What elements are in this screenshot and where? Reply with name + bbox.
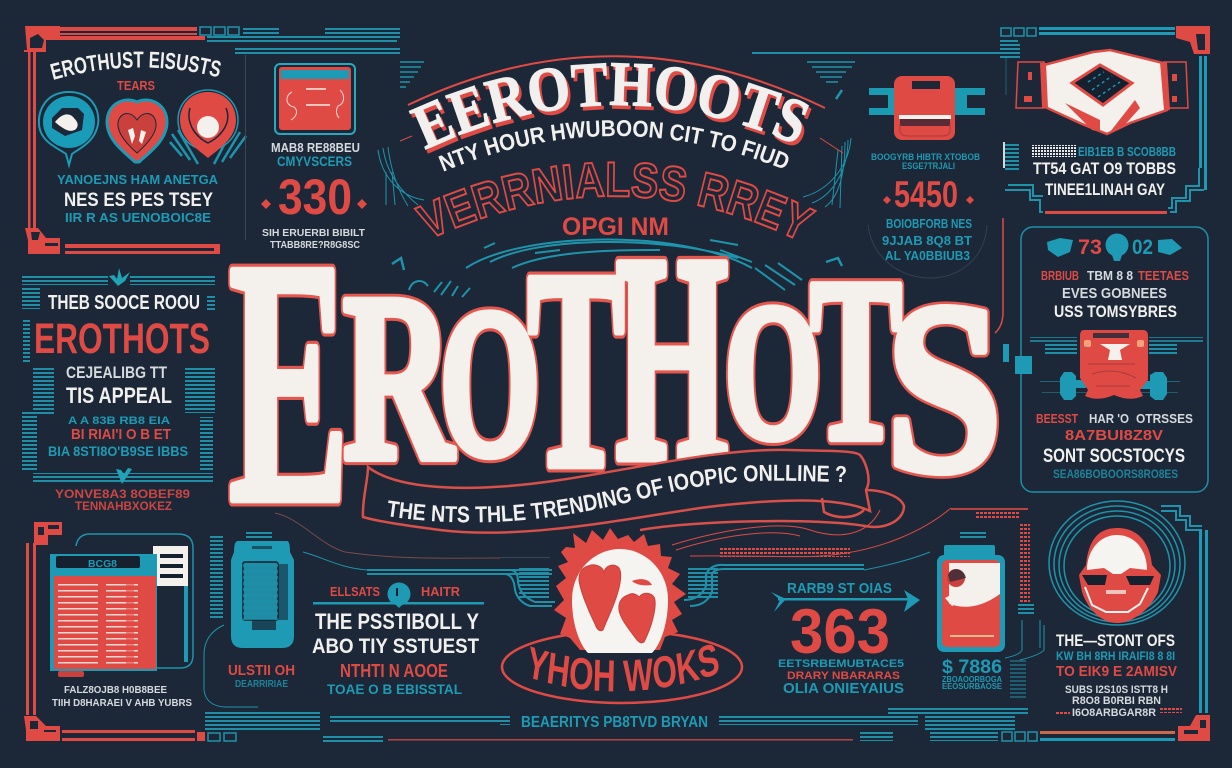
text block: A A 83B RB8 EIA: [68, 415, 170, 427]
text block: USS TOMSYBRES: [1054, 302, 1177, 321]
icon: robot: [1060, 330, 1167, 400]
dotted header: [1032, 144, 1176, 159]
panel: device: DEARRIRIAE: [235, 679, 288, 690]
stat number: 330: [278, 169, 352, 225]
tab: [1015, 356, 1032, 374]
arc title: EEROTHOOTS: [411, 66, 812, 154]
text block: NES ES PES TSEY: [64, 190, 213, 211]
panel: device: ULSTII OH: [228, 662, 295, 679]
main title: EROTHOTS: H: [616, 194, 728, 523]
window outline: [76, 534, 193, 668]
text block: YONVE8A3 8OBEF89: [55, 487, 190, 501]
panel: screen stat 330: [261, 64, 367, 251]
panel: possibility text: [312, 582, 484, 697]
main title: EROTHOTS: T: [527, 212, 625, 527]
panel: phone stat 363: EETSRBEMUBTACE5: [778, 658, 904, 670]
text block: HAR 'O: [1089, 411, 1129, 426]
panel: screen stat 330: SIH ERUERBI BIBILT: [262, 228, 365, 239]
text block: TO EIK9 E 2AMISV: [1056, 663, 1177, 680]
text block: EROTHOTS: [34, 315, 210, 363]
icon: red box: [869, 76, 985, 140]
text block: I6O8ARBGAR8R: [1072, 707, 1156, 719]
panel: phone stat 363: ZBOAOORBOGA: [942, 675, 1002, 684]
text block: [34, 292, 210, 513]
panel: phone stat 363: $ 7886: [942, 657, 1002, 678]
right icon panel: 5450: BOOGYRB HIBTR XTOBOB: [871, 152, 980, 162]
text block: THE—STONT OFS: [1056, 631, 1175, 650]
stat number: 363: [790, 597, 890, 667]
right icon panel: 5450: [868, 76, 1009, 362]
text block: BRBIUB: [1041, 268, 1079, 283]
icon row: [1047, 234, 1182, 261]
stat number: 5450: [894, 174, 958, 215]
sun badge: [500, 528, 744, 704]
text block: TIS APPEAL: [66, 383, 172, 408]
icon row: 73: [1078, 236, 1102, 259]
main title: EROTHOTS: S: [886, 253, 1002, 524]
main title: EROTHOTS: T: [527, 212, 625, 527]
main title: EROTHOTS: [229, 189, 1002, 574]
main title: EROTHOTS: E: [229, 189, 349, 574]
icon: teal heart badge: [39, 92, 98, 165]
icon: handshake: [1016, 50, 1188, 134]
bottom caption: [388, 714, 918, 740]
text block: CEJEALIBG TT: [66, 363, 167, 382]
text block: 8A7BUI8Z8V: [1065, 427, 1163, 444]
main title: EROTHOTS: O: [439, 266, 541, 501]
diamonds: [261, 199, 367, 209]
banner: [362, 448, 906, 534]
icon: spreadsheet window: [50, 546, 188, 677]
arc subtitle: NTY HOUR HWUBOON CIT TO FIUD: [438, 120, 788, 172]
side fans around titles: [378, 62, 855, 208]
panel: phone stat 363: DRARY NBARARAS: [787, 670, 900, 682]
right icon panel: 5450: 9JJAB 8Q8 BT: [882, 233, 972, 248]
panel: possibility text: ELLSATS: [330, 585, 380, 599]
subheading: TEARS: [117, 78, 155, 93]
panel: screen stat 330: CMYVSCERS: [277, 153, 352, 169]
panel: possibility text: TOAE O B EBISSTAL: [327, 681, 462, 697]
top decorative lines: [207, 27, 1020, 95]
frame: [24, 26, 239, 254]
icon row: 02: [1132, 236, 1153, 259]
main title: EROTHOTS: T: [810, 231, 902, 489]
icon: spreadsheet window: BCG8: [88, 559, 117, 570]
text block: BI RIAI'I O B ET: [71, 426, 171, 443]
text block: IIR R AS UENOBOIC8E: [65, 210, 211, 225]
panel: face: [1049, 501, 1210, 741]
icon: leaf top: [109, 268, 130, 286]
icon: red bubble badge: [170, 90, 246, 164]
text block: YANOEJNS HAM ANETGA: [57, 172, 219, 187]
white ellipse: [572, 549, 668, 653]
text block: [1036, 411, 1193, 481]
text block: TEETAES: [1138, 268, 1189, 283]
panel: document window: TIIH D8HARAEI V AHB YUBRS: [52, 698, 192, 709]
text block: R8O8 B0RBI RBN: [1072, 695, 1161, 707]
main title: EROTHOTS: S: [886, 253, 1002, 524]
right icon panel: 5450: ESGE7TRJALI: [902, 161, 955, 171]
badge text: YHOH WOKS: [530, 644, 719, 692]
panel: phone stat 363: EEOSURBAOSE: [942, 682, 1003, 691]
arrow: [771, 590, 920, 612]
icon: teal circle: [388, 582, 410, 608]
main title: EROTHOTS: T: [810, 231, 902, 489]
teal swooshes: [392, 239, 842, 297]
panel: document window: [24, 522, 236, 741]
arc outlined title: VERRNIALSS RREY: [413, 161, 818, 239]
main title: EROTHOTS: O: [724, 266, 822, 480]
frame: [1000, 26, 1210, 214]
panel: device: [204, 531, 295, 707]
sunburst: [554, 528, 686, 650]
panel: possibility text: ABO TIY SSTUEST: [312, 635, 479, 658]
panel: possibility text: HAITR: [421, 585, 460, 599]
panel: handshake: TT54 GAT O9 TOBBS: [1033, 159, 1176, 178]
text block: SUBS I2S10S ISTT8 H: [1065, 684, 1168, 696]
main title: EROTHOTS: O: [724, 266, 822, 480]
text block: SONT SOCSTOCYS: [1043, 446, 1185, 467]
panel: heart types: [24, 26, 247, 254]
text block: [1041, 268, 1189, 321]
panel: possibility text: NTHTI N AOOE: [340, 661, 448, 681]
text block: OTRSSES: [1136, 411, 1193, 426]
panel: possibility text: THE PSSTIBOLL Y: [315, 609, 479, 634]
bottom right lines: [205, 708, 1175, 742]
arc title: EEROTHOOTS: [408, 62, 809, 150]
text block: BEESST: [1036, 411, 1078, 426]
stripes frame: [22, 275, 215, 483]
main title: EROTHOTS: H: [616, 194, 728, 523]
panel: handshake: TINEE1LINAH GAY: [1045, 180, 1166, 199]
panel: appeal: [22, 268, 215, 513]
text block: [1056, 631, 1182, 719]
main title: EROTHOTS: O: [439, 266, 541, 501]
icon: red monitor: [275, 64, 355, 134]
arc tagline: OPGI NM: [562, 213, 669, 241]
text block: SEA86BOBOORS8RO8ES: [1053, 467, 1178, 481]
icon: teal device: [231, 541, 294, 648]
frame: [1161, 506, 1210, 741]
icon: hearts: [579, 565, 655, 643]
caption: FALZ8OJB8 H0B8BEE: [64, 685, 167, 696]
icon: leaf bottom: [116, 468, 132, 484]
main title: EROTHOTS: R: [343, 245, 455, 510]
icon: phone: [937, 532, 1005, 652]
text block: KW BH 8RH IRAIFI8 8 8I: [1056, 649, 1175, 663]
main title: EROTHOTS: E: [229, 189, 349, 574]
panel: phone stat 363: OLIA ONIEYAIUS: [783, 680, 904, 697]
heading: EROTHUST EISUSTS: [50, 52, 221, 80]
text block: [57, 172, 219, 225]
banner text: THE NTS THLE TRENDING OF IOOPIC ONLLINE ?: [388, 464, 846, 523]
icon: red heart badge: [107, 100, 167, 162]
text block: TBM 8 8: [1087, 268, 1133, 283]
frame: [24, 522, 236, 741]
panel: screen stat 330: TTABB8RE?R8G8SC: [270, 240, 360, 251]
panel: phone stat 363: RARB9 ST OIAS: [787, 580, 892, 597]
icon: face: [1049, 501, 1185, 625]
panel: handshake: [1000, 26, 1210, 214]
main title: EROTHOTS: R: [343, 245, 455, 510]
right icon panel: 5450: AL YA0BBIUB3: [885, 248, 970, 263]
text block: TENNAHBXOKEZ: [75, 499, 172, 513]
panel: screen stat 330: MAB8 RE88BEU: [271, 141, 360, 155]
side stripes: [1030, 337, 1203, 393]
dotted header: EIB1EB B SCOB8BB: [1078, 144, 1176, 159]
bottom connector lines: [275, 508, 1044, 700]
panel: robot stats: [1015, 227, 1208, 492]
bottom caption: BEAERITYS PB8TVD BRYAN: [521, 714, 708, 731]
text block: THEB SOOCE ROOU: [48, 292, 200, 314]
text block: BIA 8STI8O'B9SE IBBS: [48, 443, 188, 459]
panel: phone stat 363: [771, 532, 1005, 697]
right icon panel: 5450: BOIOBFORB NES: [886, 216, 972, 231]
badge ribbon ellipse: [502, 631, 742, 703]
text block: EVES GOBNEES: [1062, 285, 1167, 302]
